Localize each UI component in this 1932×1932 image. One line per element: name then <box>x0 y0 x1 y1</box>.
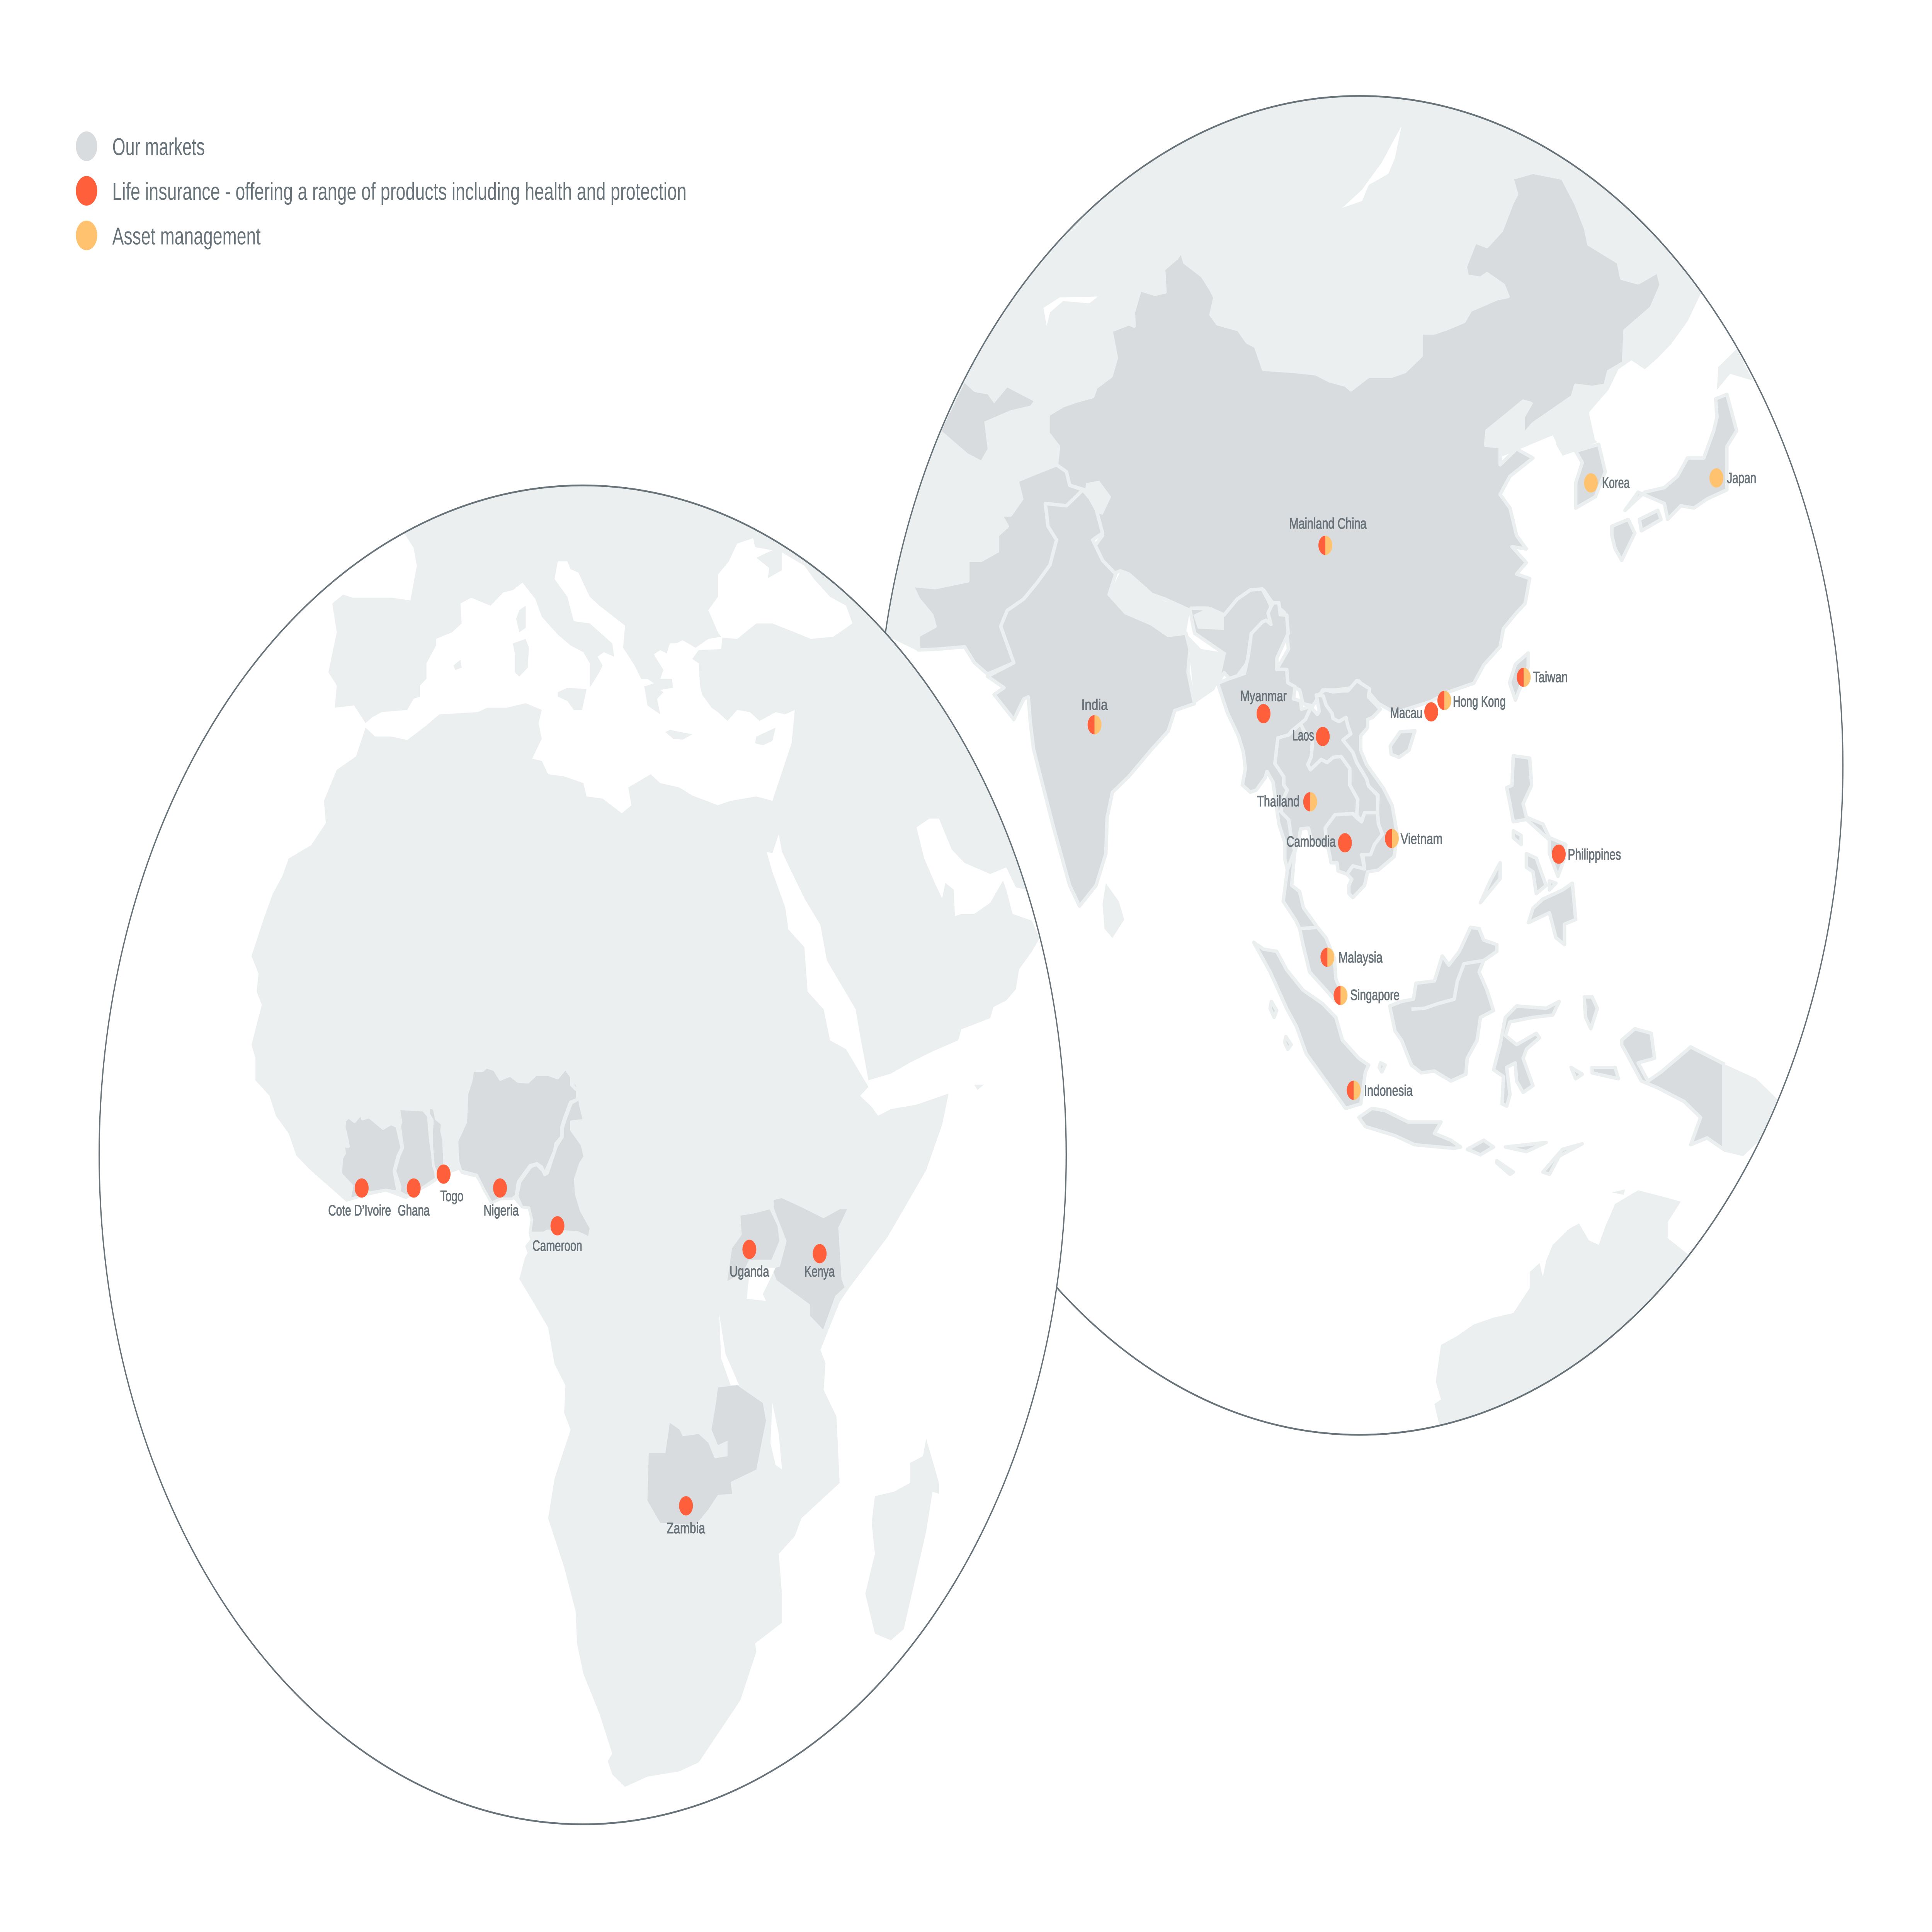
marker: Macau <box>1390 702 1438 721</box>
marker: Taiwan <box>1517 668 1568 687</box>
marker: Japan: Japan <box>1727 469 1756 486</box>
marker: Thailand <box>1257 792 1317 811</box>
Uganda <box>726 1208 781 1283</box>
marker: Ghana <box>398 1179 430 1219</box>
Vietnam <box>1318 680 1397 898</box>
marker: Laos: Laos <box>1293 727 1314 744</box>
marker: Cambodia <box>1286 833 1352 852</box>
marker: Philippines <box>1552 845 1621 864</box>
South Korea <box>1576 444 1605 508</box>
light: Nepal, Bhutan, Bangladesh, Kashmir, Sri Lanka, North Korea <box>1085 422 1597 938</box>
marker: Korea: Korea <box>1602 474 1629 492</box>
marker: Laos <box>1293 727 1330 746</box>
Peninsular Malaysia <box>1300 927 1342 1002</box>
marker: Zambia <box>667 1496 705 1537</box>
marker: Myanmar <box>1240 688 1287 723</box>
marker: Cote D'Ivoire: Cote D’Ivoire <box>328 1202 391 1219</box>
marker: India: India <box>1082 696 1108 713</box>
African lakes <box>719 1268 782 1469</box>
marker: Zambia: Zambia <box>667 1520 705 1537</box>
marker: India <box>1082 696 1108 734</box>
Togo <box>429 1107 445 1179</box>
panel: Asia map circle <box>810 26 1843 1454</box>
marker: Vietnam <box>1385 829 1442 848</box>
Cambodia <box>1325 813 1383 874</box>
maritime South-East Asia and Australia <box>1254 756 1777 1454</box>
Nigeria <box>457 1067 577 1203</box>
West Africa markets <box>341 1067 591 1238</box>
Ghana <box>395 1109 436 1196</box>
Cameroon <box>517 1077 591 1238</box>
marker: Mainland China: Mainland China <box>1289 515 1367 532</box>
marker: Cameroon: Cameroon <box>532 1238 582 1254</box>
Africa landmasses <box>252 393 1167 1787</box>
marker: Hong Kong: Hong Kong <box>1453 693 1506 710</box>
North-east India <box>1190 589 1274 683</box>
marker: Indonesia <box>1347 1081 1413 1100</box>
East and southern Africa <box>648 1197 939 1640</box>
Papua <box>1724 1064 1777 1156</box>
marker: Taiwan: Taiwan <box>1533 669 1568 686</box>
India <box>988 490 1194 906</box>
marker: Singapore <box>1333 986 1400 1005</box>
Philippines <box>1480 756 1576 945</box>
legend item: our markets: Our markets <box>112 133 205 160</box>
Myanmar <box>1218 603 1311 870</box>
marker: Myanmar: Myanmar <box>1240 688 1287 705</box>
Mediterranean islands <box>453 605 984 1090</box>
marker: Malaysia: Malaysia <box>1338 949 1383 966</box>
marker: Malaysia <box>1320 947 1383 967</box>
marker: Ghana: Ghana <box>398 1202 430 1219</box>
Laos <box>1301 695 1378 821</box>
light land: Africa, Arabia and southern Europe <box>252 393 1167 1787</box>
Africa circle background <box>99 485 1066 1824</box>
legend <box>76 131 687 250</box>
Australia <box>1434 1189 1730 1454</box>
China <box>1048 172 1661 713</box>
marker: Singapore: Singapore <box>1350 987 1400 1003</box>
Thailand <box>1275 724 1358 938</box>
Hainan and Taiwan <box>1390 653 1528 757</box>
panel: Africa map circle <box>99 393 1167 1824</box>
Kenya <box>770 1197 849 1332</box>
Java and Lesser Sunda islands <box>1359 1108 1582 1174</box>
marker: Mainland China <box>1289 515 1367 555</box>
Japan <box>1625 394 1737 519</box>
marker: Philippines: Philippines <box>1568 846 1621 863</box>
Borneo <box>1390 927 1497 1081</box>
Zambia <box>648 1385 766 1525</box>
legend item: our markets <box>76 131 205 161</box>
marker: Togo: Togo <box>440 1188 463 1205</box>
marker: Indonesia: Indonesia <box>1364 1082 1413 1099</box>
marker: Vietnam: Vietnam <box>1401 830 1442 847</box>
marker: Hong Kong <box>1437 691 1506 710</box>
marker: Kenya <box>804 1244 835 1280</box>
marker: Cameroon <box>532 1216 582 1254</box>
Moluccas <box>1571 997 1618 1079</box>
Sumatra <box>1254 942 1369 1108</box>
marker: Togo <box>437 1165 463 1205</box>
Sulawesi <box>1493 1002 1559 1106</box>
marker: Nigeria <box>483 1179 519 1219</box>
Asia circle outline <box>876 96 1843 1435</box>
marker: Uganda <box>730 1240 769 1280</box>
marker: Nigeria: Nigeria <box>483 1202 519 1219</box>
marker: Kenya: Kenya <box>804 1263 835 1280</box>
marker: Cote D'Ivoire <box>328 1179 391 1219</box>
mainland South-East Asia <box>1218 603 1528 938</box>
marker: Thailand: Thailand <box>1257 793 1299 810</box>
marker: Uganda: Uganda <box>730 1263 769 1280</box>
Cote d'Ivoire <box>341 1114 402 1199</box>
marker: Macau: Macau <box>1390 705 1422 721</box>
marker: Japan <box>1709 468 1756 488</box>
marker: Cambodia: Cambodia <box>1286 833 1336 850</box>
legend item: asset management: Asset management <box>112 222 261 250</box>
Africa circle outline <box>99 485 1066 1824</box>
Asia landmasses <box>810 26 1796 1454</box>
marker: Korea <box>1584 473 1629 493</box>
legend item: life insurance: Life insurance - offering a range of products including health and protection <box>112 178 687 205</box>
Madagascar <box>865 1439 939 1640</box>
Pakistan <box>912 465 1083 674</box>
light land: Russia and Central Asia <box>886 97 1753 938</box>
